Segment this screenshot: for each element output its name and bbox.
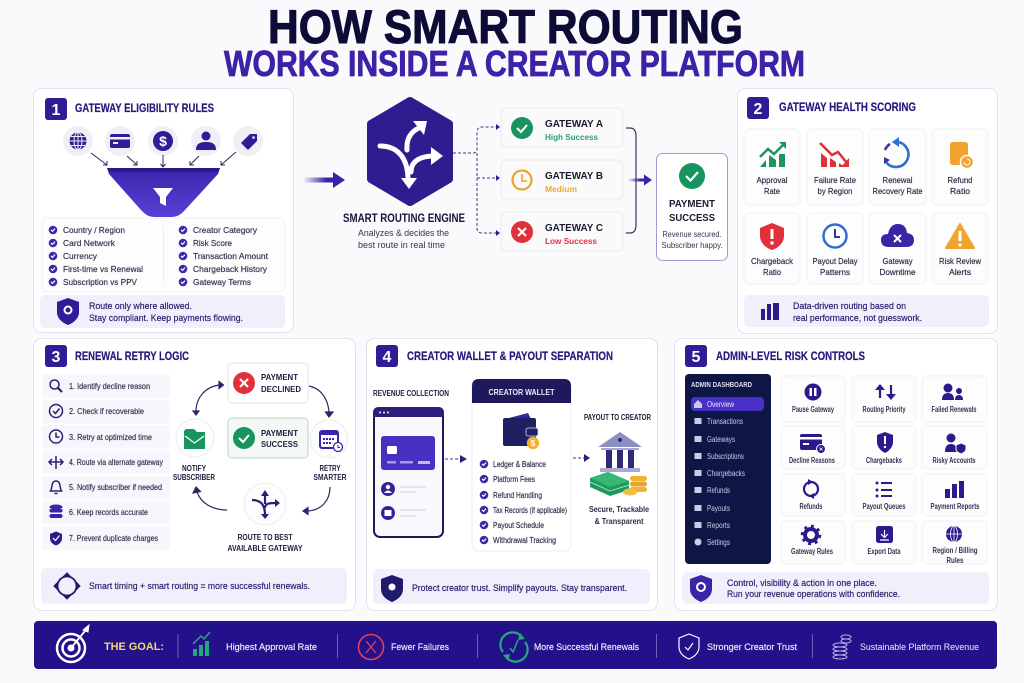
goal: more successful renewals <box>500 632 639 662</box>
heading: RENEWAL RETRY LOGIC <box>75 349 189 363</box>
badge 5 <box>685 345 707 367</box>
metric: failure rate: Failure Rate <box>814 175 856 185</box>
metric: chargeback ratio: Ratio <box>763 267 781 277</box>
admin sidebar: ADMIN DASHBOARD <box>691 382 752 389</box>
gateway A <box>501 108 623 147</box>
metric: payout delay: Payout Delay <box>812 256 858 266</box>
badge 3: 3 <box>52 349 61 366</box>
control: failed renewals: Failed Renewals <box>932 405 977 414</box>
badge 1: 1 <box>52 102 61 119</box>
admin sidebar: Reports <box>707 521 730 530</box>
metric: gateway downtime <box>869 213 926 284</box>
creator wallet card: Refund Handling <box>493 491 542 500</box>
arrow: to routing engine <box>303 172 345 188</box>
callout: control and visibility: Run your revenue operations with confidence. <box>727 589 900 600</box>
retry steps list: 1. Identify decline reason <box>69 381 150 391</box>
badge 2 <box>747 97 769 119</box>
retry smarter step: RETRY <box>320 464 341 473</box>
arrow: collection to wallet <box>445 455 467 463</box>
callout: protect trust <box>373 569 650 604</box>
gateway C <box>501 212 623 251</box>
creator wallet card: Ledger & Balance <box>493 460 546 469</box>
admin sidebar: Settings <box>707 538 730 547</box>
payment success card: Subscriber happy. <box>662 241 722 250</box>
goal: fewer failures <box>358 634 449 660</box>
control: chargebacks <box>852 426 916 469</box>
metric: chargeback ratio <box>744 213 800 284</box>
metric: approval rate: Rate <box>764 186 780 196</box>
panel: creator wallet and payout separation <box>366 338 658 610</box>
admin sidebar: Overview <box>707 400 734 409</box>
metric: approval rate <box>744 129 800 205</box>
admin sidebar: Gateways <box>707 435 735 444</box>
bracket and arrow to success <box>626 128 652 233</box>
callout: compliance: Route only where allowed. <box>89 301 192 312</box>
criteria list <box>42 218 285 292</box>
admin sidebar: Chargebacks <box>707 469 745 478</box>
criteria list: First-time vs Renewal <box>63 264 143 274</box>
admin sidebar: Subscriptions <box>707 452 744 461</box>
route to best gateway step <box>228 483 303 553</box>
control: region and billing rules: Rules <box>946 556 964 565</box>
callout: control and visibility: Control, visibility & action in one place. <box>727 578 877 589</box>
control: refunds: Refunds <box>800 502 823 511</box>
criteria list: Creator Category <box>193 225 258 235</box>
criteria list: Card Network <box>63 238 116 248</box>
badge 4 <box>376 345 398 367</box>
control: payout queues <box>852 474 916 516</box>
engine label: best route in real time <box>358 240 445 250</box>
callout: smart timing: Smart timing + smart routing = more successful renewals. <box>89 581 310 592</box>
metric: renewal recovery: Renewal <box>882 175 913 185</box>
metric: refund ratio: Refund <box>948 175 973 185</box>
control: risky accounts: Risky Accounts <box>932 456 976 465</box>
payment success card: Revenue secured. <box>662 230 722 239</box>
goal label: THE GOAL: <box>104 641 164 653</box>
callout: protect trust: Protect creator trust. Simplify payouts. Stay transparent. <box>412 583 627 594</box>
gateway A: GATEWAY A <box>545 118 603 130</box>
admin sidebar: Payouts <box>707 504 730 513</box>
metric: gateway downtime: Gateway <box>882 256 913 266</box>
criteria list: Transaction Amount <box>193 251 269 261</box>
retry steps list: 5. Notify subscriber if needed <box>69 482 162 492</box>
icon: bank with money <box>590 432 647 496</box>
metric: gateway downtime: Downtime <box>880 267 916 277</box>
gateway C: Low Success <box>545 236 597 246</box>
gateway B: GATEWAY B <box>545 170 603 182</box>
panel: renewal retry logic <box>34 338 356 610</box>
criteria list: Chargeback History <box>193 264 268 274</box>
engine label <box>343 213 465 250</box>
payout label: PAYOUT TO CREATOR <box>584 413 651 422</box>
creator wallet card: Withdrawal Tracking <box>493 536 556 545</box>
goal: highest approval rate: Highest Approval Rate <box>226 642 317 652</box>
goal: stronger creator trust <box>679 634 797 659</box>
control: failed renewals <box>922 376 987 422</box>
notify subscriber step <box>173 419 215 482</box>
control: chargebacks: Chargebacks <box>866 456 902 465</box>
icon: target <box>57 625 89 662</box>
metric: renewal recovery: Recovery Rate <box>872 186 923 196</box>
gateway B: Medium <box>545 184 577 194</box>
metric: risk review: Alerts <box>949 267 971 277</box>
callout: data-driven <box>744 295 989 327</box>
creator wallet card: Tax Records (if applicable) <box>493 506 567 515</box>
badge 3 <box>45 345 67 367</box>
control: export data: Export Data <box>868 547 901 556</box>
panel: gateway eligibility rules <box>34 88 294 332</box>
control: routing priority: Routing Priority <box>862 405 906 414</box>
retry steps list: 6. Keep records accurate <box>69 507 148 517</box>
metric: payout delay <box>807 213 863 284</box>
retry steps list: 4. Route via alternate gateway <box>69 457 164 467</box>
metric: approval rate: Approval <box>756 175 788 185</box>
control: routing priority <box>852 376 916 422</box>
payment declined box <box>228 363 308 403</box>
metric: failure rate <box>807 129 863 205</box>
route to best gateway step: ROUTE TO BEST <box>238 533 293 542</box>
metric: renewal recovery <box>869 129 926 205</box>
criteria list: Gateway Terms <box>193 277 251 287</box>
control: payment reports <box>922 474 987 516</box>
retry smarter step <box>310 420 348 482</box>
retry cycle arrows <box>193 382 333 514</box>
icon: card <box>105 126 135 156</box>
metric: failure rate: by Region <box>818 186 853 196</box>
dashed connectors to gateways <box>453 124 500 236</box>
metric: payout delay: Patterns <box>820 267 850 277</box>
icon: globe <box>63 126 93 156</box>
title <box>224 0 805 84</box>
routing engine hexagon <box>371 101 449 202</box>
retry steps list: 2. Check if recoverable <box>69 406 144 416</box>
control: region and billing rules: Region / Billing <box>932 546 978 555</box>
route to best gateway step: AVAILABLE GATEWAY <box>228 544 303 553</box>
control: gateway rules: Gateway Rules <box>791 547 833 556</box>
payout caption: Secure, Trackable <box>589 504 649 514</box>
control: region and billing rules <box>922 521 987 565</box>
arrow: wallet to payout <box>573 454 590 462</box>
badge 1 <box>45 98 67 120</box>
metric: risk review <box>932 213 988 284</box>
control: export data <box>852 521 916 564</box>
goal: stronger creator trust: Stronger Creator Trust <box>707 642 797 652</box>
notify subscriber step: SUBSCRIBER <box>173 473 215 482</box>
metric: refund ratio <box>932 129 988 205</box>
callout: data-driven: Data-driven routing based on <box>793 301 906 312</box>
creator wallet card <box>472 379 571 551</box>
admin sidebar <box>685 374 771 564</box>
creator wallet card: Payout Schedule <box>493 521 544 530</box>
payment success card: PAYMENT <box>669 198 716 210</box>
payout caption <box>589 504 649 526</box>
creator wallet card: Platform Fees <box>493 475 535 484</box>
callout: smart timing <box>41 568 347 604</box>
metric: refund ratio: Ratio <box>950 186 970 196</box>
arrows into funnel <box>91 152 236 167</box>
goal banner <box>34 621 997 669</box>
control: decline reasons <box>781 426 845 469</box>
payout caption: & Transparent <box>594 516 644 526</box>
payment success card: SUCCESS <box>669 212 715 224</box>
payment success box: PAYMENT <box>261 428 299 438</box>
admin sidebar: Transactions <box>707 417 743 426</box>
revenue collection label: REVENUE COLLECTION <box>373 389 449 398</box>
heading: GATEWAY ELIGIBILITY RULES <box>75 101 214 115</box>
criteria list: Currency <box>63 251 98 261</box>
control: pause gateway <box>781 376 845 422</box>
icon: dollar: $ <box>159 133 167 149</box>
goal: sustainable platform revenue: Sustainable Platform Revenue <box>860 642 979 652</box>
icon: tag <box>233 126 263 156</box>
goal: more successful renewals: More Successful Renewals <box>534 642 639 652</box>
panel: admin-level risk controls <box>674 338 998 610</box>
criteria list: Country / Region <box>63 225 125 235</box>
title: HOW SMART ROUTING <box>268 0 743 53</box>
control: gateway rules <box>781 521 845 564</box>
payment success card <box>656 154 728 260</box>
phone mockup <box>373 407 444 537</box>
goal: fewer failures: Fewer Failures <box>391 642 449 652</box>
control: pause gateway: Pause Gateway <box>792 405 834 414</box>
control: payment reports: Payment Reports <box>930 502 980 511</box>
control: risky accounts <box>922 426 987 469</box>
title: WORKS INSIDE A CREATOR PLATFORM <box>224 43 805 84</box>
badge 4: 4 <box>383 349 392 366</box>
payment success box: SUCCESS <box>261 439 298 449</box>
metric: risk review: Risk Review <box>939 256 982 266</box>
retry steps list: 3. Retry at optimized time <box>69 432 152 442</box>
metric: chargeback ratio: Chargeback <box>751 256 794 266</box>
notify subscriber step: NOTIFY <box>182 464 207 473</box>
gateway A: High Success <box>545 132 598 142</box>
retry steps list: 7. Prevent duplicate charges <box>69 533 158 543</box>
creator wallet card: CREATOR WALLET <box>488 387 555 397</box>
icon: person <box>191 126 221 156</box>
heading: GATEWAY HEALTH SCORING <box>779 100 916 114</box>
control: refunds <box>781 474 845 516</box>
icon: dollar <box>148 126 178 156</box>
control: decline reasons: Decline Reasons <box>789 456 835 465</box>
criteria list: Subscription vs PPV <box>63 277 137 287</box>
callout: control and visibility <box>682 572 989 604</box>
callout: compliance <box>40 295 285 328</box>
badge 5: 5 <box>692 349 701 366</box>
gateway B <box>501 160 623 199</box>
panel: gateway health scoring <box>738 88 998 334</box>
control: payout queues: Payout Queues <box>862 502 906 511</box>
retry smarter step: SMARTER <box>314 473 347 482</box>
funnel <box>107 168 220 217</box>
engine label: Analyzes & decides the <box>358 228 449 238</box>
heading: ADMIN-LEVEL RISK CONTROLS <box>716 349 865 363</box>
icon: wallet <box>503 413 539 449</box>
criteria list: Risk Score <box>193 238 232 248</box>
payment declined box: DECLINED <box>261 384 301 394</box>
payment success box <box>228 418 308 458</box>
engine label: SMART ROUTING ENGINE <box>343 213 465 225</box>
admin sidebar: Refunds <box>707 486 730 495</box>
icon: wallet: $ <box>531 439 536 448</box>
callout: compliance: Stay compliant. Keep payments flowing. <box>89 313 243 324</box>
payment declined box: PAYMENT <box>261 372 299 382</box>
goal: sustainable platform revenue <box>833 635 979 659</box>
heading: CREATOR WALLET & PAYOUT SEPARATION <box>407 349 613 363</box>
retry steps list <box>42 374 170 550</box>
goal: highest approval rate <box>193 632 317 656</box>
callout: data-driven: real performance, not guesswork. <box>793 313 922 324</box>
gateway C: GATEWAY C <box>545 222 603 234</box>
badge 2: 2 <box>754 101 763 118</box>
